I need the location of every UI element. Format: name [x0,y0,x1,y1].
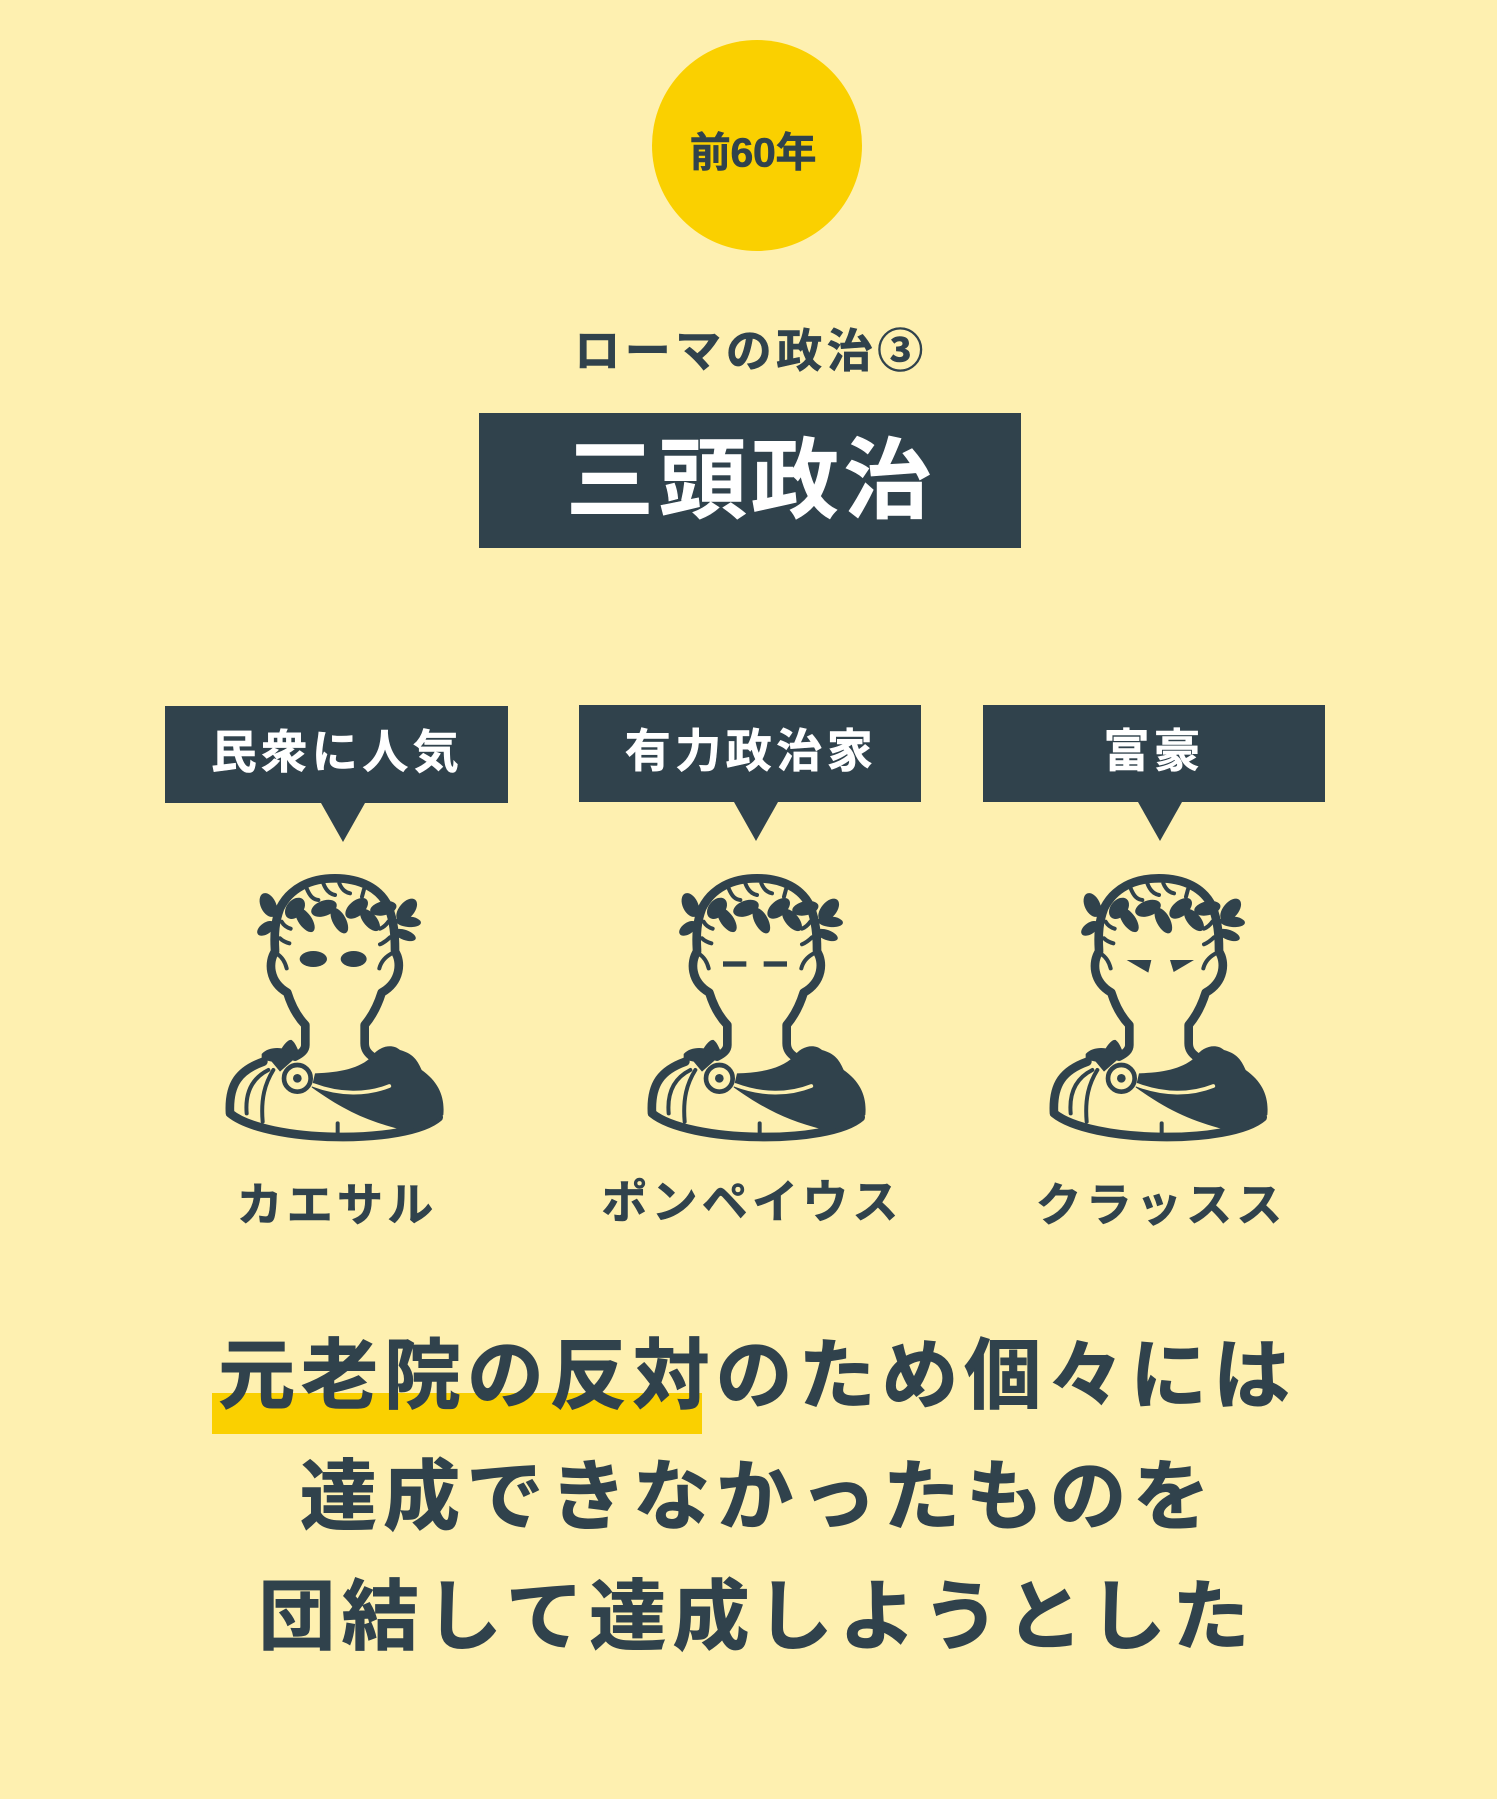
message line 1: 元老院の反対のため個々には [218,1334,1296,1420]
message line 2: 達成できなかったものを [300,1454,1216,1540]
icon definitions [0,0,13,13]
eyes: closed [723,961,787,967]
name: Crassus: クラッスス [1036,1179,1286,1231]
year badge [652,40,862,251]
subtitle: ローマの政治③ [574,325,928,377]
speech bubble: Caesar [165,706,508,842]
message line 3: 団結して達成しようとした [258,1574,1256,1660]
speech bubble: Crassus: 富豪 [1104,725,1204,777]
icon: Caesar bust [226,874,444,1142]
year badge: 前60年 [690,130,816,176]
eyes: round [300,951,367,967]
highlight marker [212,1393,702,1434]
name: Caesar: カエサル [237,1179,437,1231]
speech bubble: Pompey [579,705,921,841]
eyes: sharp [1127,960,1194,973]
icon: Pompey bust [648,874,866,1142]
speech bubble: Pompey: 有力政治家 [625,725,877,777]
name: Pompey: ポンペイウス [601,1176,903,1228]
title: 三頭政治 [566,431,936,530]
speech bubble: Caesar: 民衆に人気 [211,726,463,778]
speech bubble: Crassus [983,705,1325,841]
icon: Crassus bust [1050,874,1268,1142]
title [479,413,1021,548]
